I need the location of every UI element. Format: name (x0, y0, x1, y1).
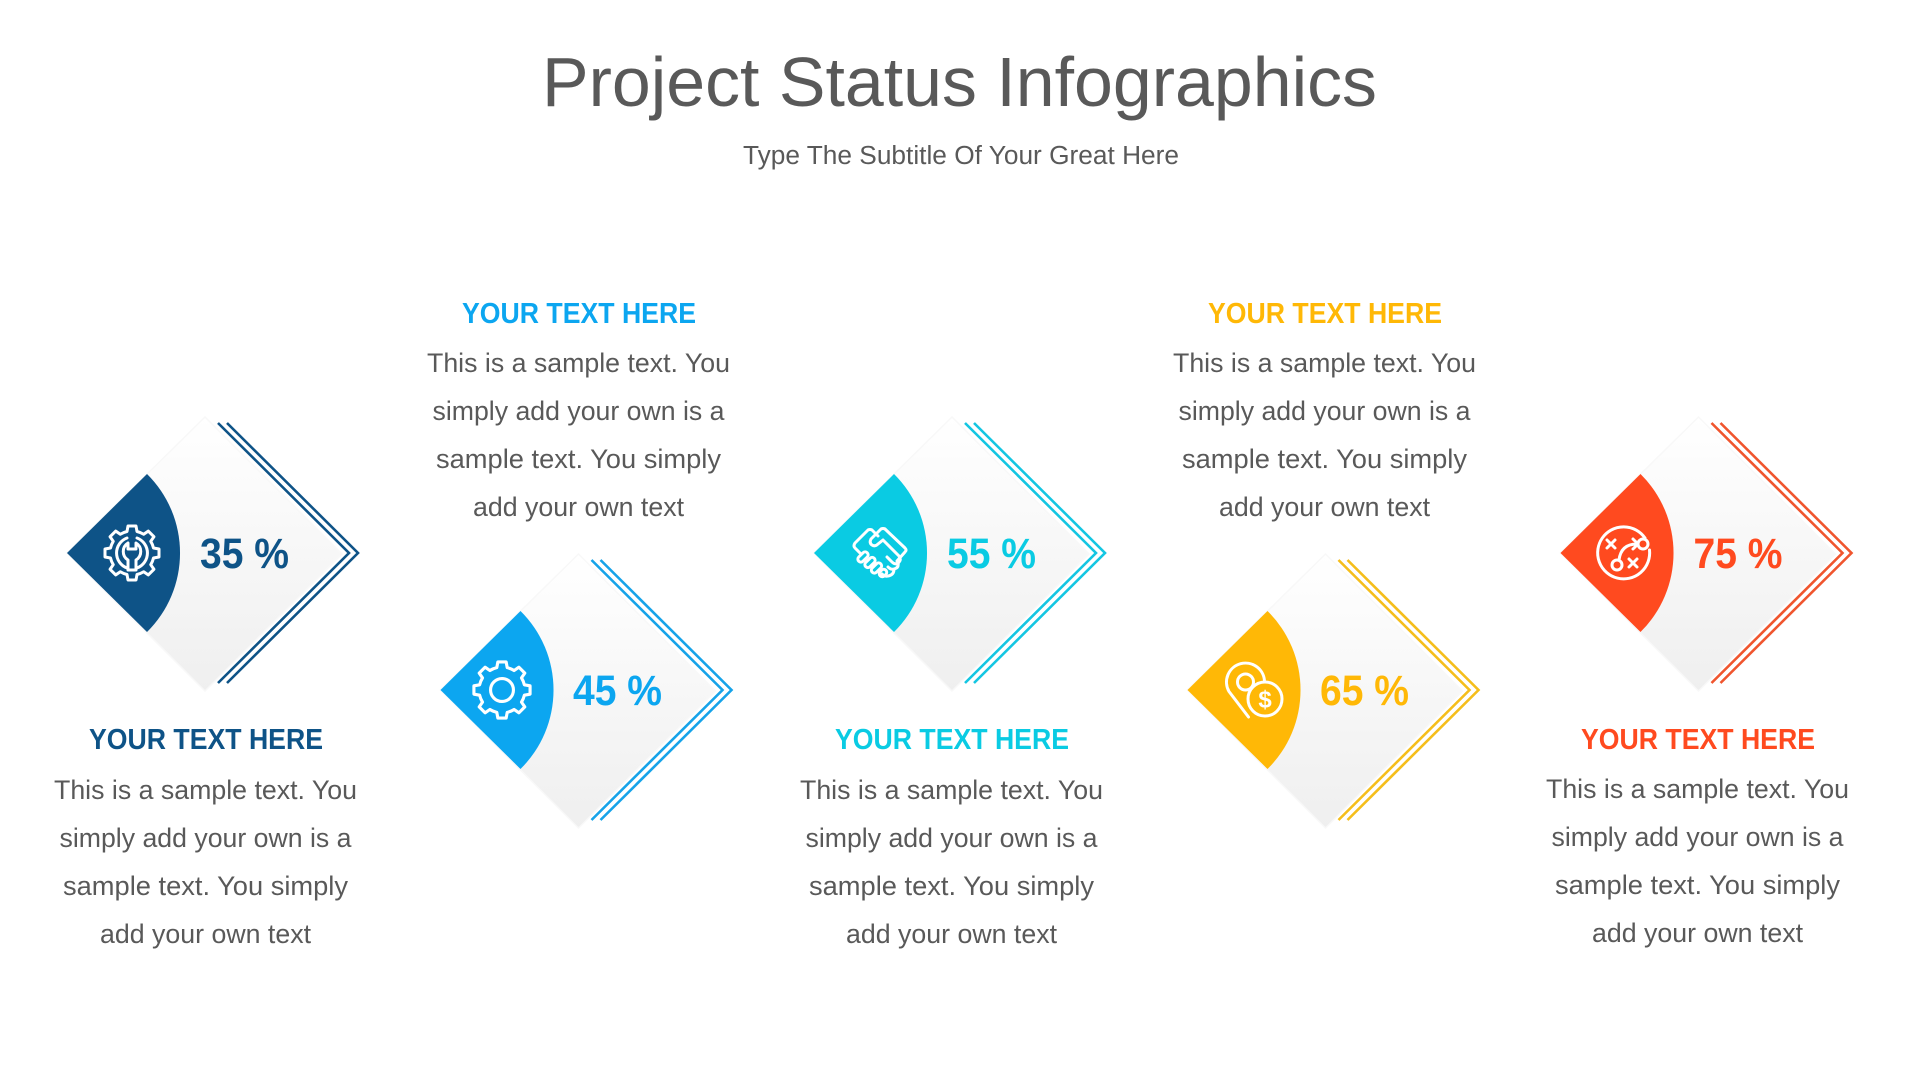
icon: location pin with dollar coin (1227, 663, 1282, 717)
text block: 75 percent: YOUR TEXT HERE (1581, 724, 1815, 756)
diamond card (1188, 554, 1462, 828)
percentage: 65 % (1320, 667, 1409, 715)
text block: 35 percent: This is a sample text. You (54, 775, 357, 805)
text block: 75 percent (1546, 724, 1849, 948)
text block: 35 percent: sample text. You simply (63, 871, 349, 901)
double chevron (965, 423, 1105, 683)
icon: gear with wrench (105, 526, 159, 580)
percentage: 75 % (1694, 530, 1782, 578)
diamond card (814, 417, 1089, 691)
text block: 55 percent (800, 724, 1103, 949)
icon: gear (474, 662, 530, 718)
text block: 45 percent: add your own text (473, 492, 685, 522)
colored sector (67, 474, 180, 632)
percentage: 35 % (200, 530, 289, 578)
title: Project Status Infographics (542, 43, 1377, 121)
colored sector (1188, 611, 1301, 769)
text block: 75 percent: simply add your own is a (1552, 822, 1844, 852)
panel: 75 percent status (1560, 417, 1852, 691)
text block: 75 percent: sample text. You simply (1555, 870, 1841, 900)
text block: 65 percent: add your own text (1219, 492, 1431, 522)
text block: 75 percent: This is a sample text. You (1546, 774, 1849, 804)
double chevron (1712, 423, 1852, 683)
percentage: 55 % (947, 530, 1036, 578)
text block: 35 percent: simply add your own is a (60, 823, 352, 853)
icon: location pin with dollar coin: $ (1258, 686, 1272, 714)
icon: handshake (854, 528, 906, 578)
panel: 55 percent status (814, 417, 1105, 691)
diamond card (440, 554, 716, 828)
percentage: 45 % (573, 667, 662, 715)
text block: 35 percent: YOUR TEXT HERE (89, 724, 323, 756)
subtitle: Type The Subtitle Of Your Great Here (743, 142, 1179, 170)
text block: 45 percent: This is a sample text. You (427, 348, 730, 378)
text block: 55 percent: This is a sample text. You (800, 775, 1103, 805)
diamond card (67, 417, 342, 691)
text block: 45 percent: YOUR TEXT HERE (462, 298, 696, 330)
text block: 45 percent: simply add your own is a (432, 396, 725, 426)
text block: 35 percent: add your own text (100, 919, 312, 949)
panel: 45 percent status (440, 554, 732, 828)
colored sector (1560, 474, 1674, 632)
colored sector (814, 474, 927, 632)
text block: 65 percent: simply add your own is a (1178, 396, 1471, 426)
text block: 55 percent: YOUR TEXT HERE (835, 724, 1069, 756)
text block: 45 percent: sample text. You simply (436, 444, 722, 474)
text block: 55 percent: sample text. You simply (809, 871, 1095, 901)
diamond card (1560, 417, 1836, 691)
text block: 55 percent: add your own text (846, 919, 1058, 949)
text block: 65 percent: This is a sample text. You (1173, 348, 1476, 378)
double chevron (218, 423, 358, 683)
double chevron (1338, 560, 1478, 820)
text block: 45 percent (427, 298, 730, 522)
text block: 65 percent: sample text. You simply (1182, 444, 1468, 474)
double chevron (592, 560, 732, 820)
colored sector (440, 611, 554, 769)
icon: strategy play (1598, 527, 1650, 579)
text block: 65 percent (1173, 298, 1476, 522)
panel: 65 percent status (1188, 554, 1478, 828)
text block: 75 percent: add your own text (1592, 918, 1804, 948)
text block: 35 percent (54, 724, 357, 949)
text block: 55 percent: simply add your own is a (806, 823, 1098, 853)
text block: 65 percent: YOUR TEXT HERE (1208, 298, 1442, 330)
panel: 35 percent status (67, 417, 358, 691)
